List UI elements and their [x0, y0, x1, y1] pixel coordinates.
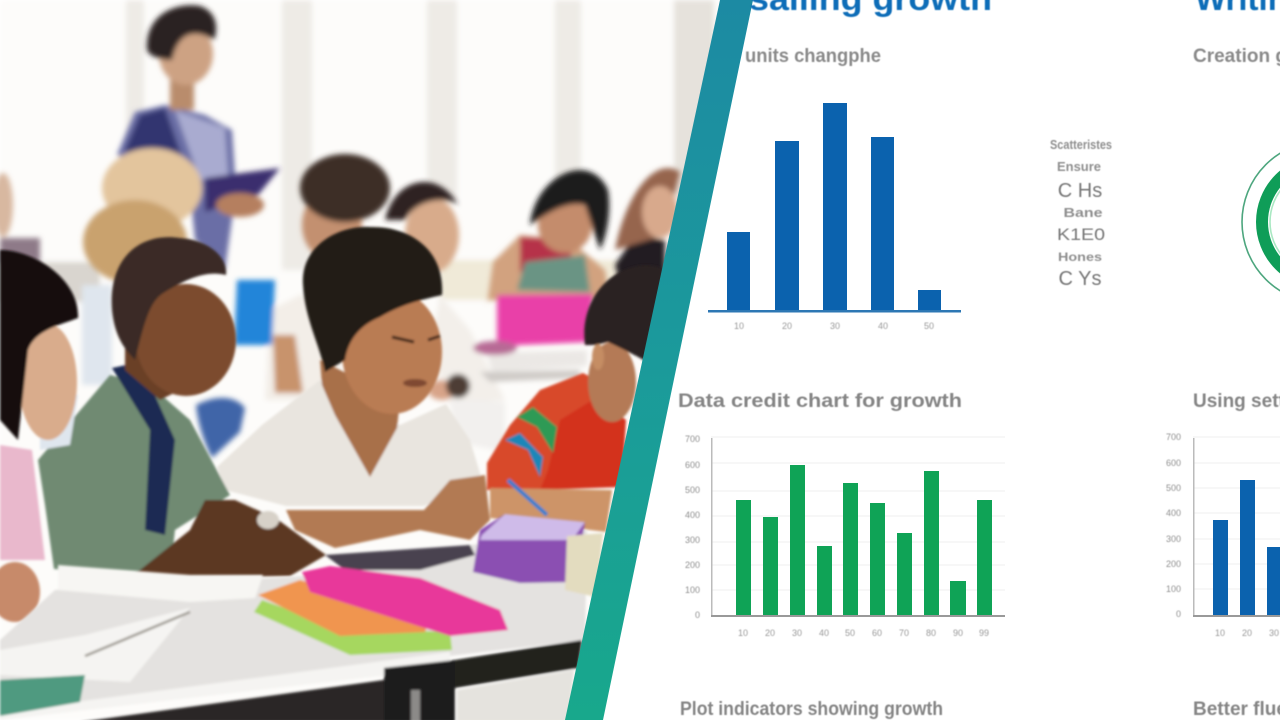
legend: text list: K1E0	[1057, 225, 1105, 244]
student: back row girl	[385, 182, 505, 405]
blue chart y-axis labels: 500	[1166, 483, 1181, 493]
blue chart x-axis labels: 30	[1269, 628, 1279, 638]
bar chart x-axis labels: 30	[830, 321, 840, 331]
green chart y-axis labels: 600	[685, 460, 700, 470]
bar chart x-axis labels: 50	[924, 321, 934, 331]
teal pouch	[0, 675, 85, 716]
legend: text list: Ensure	[1057, 160, 1101, 174]
back row students	[0, 5, 680, 458]
student: centre boy in white T-shirt	[217, 227, 490, 548]
orange notebook	[258, 580, 430, 636]
student: back right girl	[615, 168, 680, 300]
subheading: bottom left: Plot indicators showing growth	[680, 699, 943, 720]
student: girl on the left	[0, 250, 78, 622]
panel: classroom photo	[0, 0, 740, 720]
green chart y-axis labels: 100	[685, 585, 700, 595]
green chart y-axis labels: 400	[685, 510, 700, 520]
bar chart x-axis labels	[734, 321, 934, 331]
blue chart y-axis labels: 400	[1166, 508, 1181, 518]
green chart y-axis labels: 700	[685, 434, 700, 444]
bar chart x-axis labels: 20	[782, 321, 792, 331]
green chart y-axis labels: 0	[695, 610, 700, 620]
blue chart y-axis labels: 300	[1166, 534, 1181, 544]
cream pouch	[565, 533, 603, 597]
green chart y-axis labels	[685, 434, 700, 620]
blue chart y-axis labels: 100	[1166, 584, 1181, 594]
green chart x-axis labels: 20	[765, 628, 775, 638]
legend: text list: C Hs	[1058, 180, 1102, 202]
green chart x-axis labels: 99	[979, 628, 989, 638]
foreground students	[0, 227, 662, 622]
pink pencil case	[302, 566, 508, 636]
subheading: green chart: Data credit chart for growth	[678, 391, 962, 412]
diagonal teal band	[565, 0, 753, 720]
blue chart y-axis labels: 700	[1166, 432, 1181, 442]
blue chart y-axis labels: 600	[1166, 458, 1181, 468]
pink laptop	[497, 294, 593, 346]
bar chart: green values	[685, 434, 1005, 638]
green chart x-axis labels: 50	[845, 628, 855, 638]
green chart y-axis labels: 500	[685, 485, 700, 495]
legend: text list: Hones	[1058, 250, 1102, 264]
green chart x-axis labels: 70	[899, 628, 909, 638]
student: back row boy	[265, 154, 390, 400]
bar chart: blue growth	[708, 103, 961, 331]
student: right boy in striped sweater	[487, 265, 662, 532]
blue chart y-axis labels	[1166, 432, 1181, 619]
blue chair	[234, 280, 275, 345]
legend: text list: Scatteristes	[1050, 138, 1112, 152]
blue chart x-axis labels: 10	[1215, 628, 1225, 638]
bar chart x-axis labels: 10	[734, 321, 744, 331]
green chart x-axis labels: 40	[819, 628, 829, 638]
green chart x-axis labels: 30	[792, 628, 802, 638]
subheading: top left chart: units changphe	[745, 46, 881, 67]
blue chart x-axis labels	[1215, 628, 1279, 638]
legend: text list: C Ys	[1059, 268, 1101, 290]
green chart y-axis labels: 200	[685, 560, 700, 570]
student: boy in green shirt	[38, 237, 326, 578]
back desks	[487, 350, 587, 372]
legend: text list: Bane	[1064, 206, 1103, 220]
windows and back wall	[0, 0, 717, 305]
blue chart y-axis labels: 0	[1176, 609, 1181, 619]
green chart x-axis labels	[738, 628, 989, 638]
blue chart y-axis labels: 200	[1166, 559, 1181, 569]
green chart x-axis labels: 10	[738, 628, 748, 638]
legend: text list	[1050, 138, 1112, 290]
desk	[0, 514, 603, 720]
green chart x-axis labels: 60	[872, 628, 882, 638]
blue striped shirt	[196, 398, 245, 458]
donut chart: green rings	[1242, 141, 1280, 303]
green chart x-axis labels: 90	[953, 628, 963, 638]
student: girl at pink laptop	[487, 170, 610, 305]
green chart x-axis labels: 80	[926, 628, 936, 638]
green notebook	[254, 600, 452, 655]
phone and stationery	[325, 545, 475, 570]
bar chart x-axis labels: 40	[878, 321, 888, 331]
purple pouch	[473, 514, 585, 583]
student: standing child with tablet	[117, 5, 280, 270]
student: blond children	[0, 148, 202, 385]
bar chart: blue lower values	[1166, 432, 1280, 638]
green chart y-axis labels: 300	[685, 535, 700, 545]
blue chart x-axis labels: 20	[1242, 628, 1252, 638]
